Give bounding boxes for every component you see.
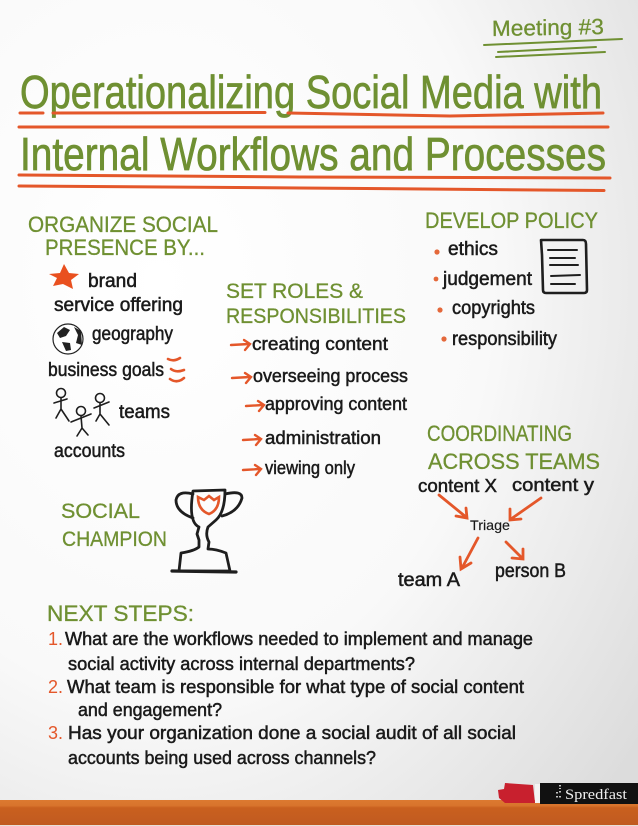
item: responsibility: responsibility <box>452 329 557 350</box>
heading: social champion <box>61 500 167 551</box>
item: judgement: judgement <box>442 269 533 290</box>
heading: set roles and responsibilities: RESPONSIBILITIES <box>226 305 406 328</box>
icon: star <box>49 264 79 289</box>
step 2: 2. <box>48 677 63 697</box>
item: viewing only: viewing only <box>265 458 355 478</box>
heading: next steps: NEXT STEPS: <box>47 601 194 626</box>
heading: set roles and responsibilities: SET ROLES & <box>226 280 363 303</box>
step 3: accounts being used across channels? <box>68 748 376 768</box>
step 1: What are the workflows needed to implement and manage <box>65 629 533 649</box>
text: business goals: business goals <box>48 360 164 381</box>
step 3: Has your organization done a social audit of all social <box>68 723 516 743</box>
text: content X: content X <box>418 476 497 496</box>
item: copyrights: copyrights <box>452 298 535 319</box>
text: geography: geography <box>92 324 173 345</box>
heading: coordinating across teams <box>427 421 600 474</box>
panel: set roles and responsibilities <box>226 280 408 478</box>
text: service offering: service offering <box>54 295 183 316</box>
step 2: What team is responsible for what type of social content <box>67 677 524 697</box>
heading: coordinating across teams: COORDINATING <box>427 421 572 446</box>
text: person B: person B <box>495 561 566 582</box>
icon: document <box>541 240 587 293</box>
heading: coordinating across teams: ACROSS TEAMS <box>428 449 600 474</box>
text: teams: teams <box>119 402 170 423</box>
heading: organize social presence: ORGANIZE SOCIAL <box>28 212 218 237</box>
step 2: and engagement? <box>78 700 222 720</box>
item: administration: administration <box>265 428 381 448</box>
marker <box>498 783 638 804</box>
panel: organize social presence <box>28 212 218 462</box>
item: approving content: approving content <box>265 394 407 414</box>
step 1 <box>48 629 533 674</box>
heading: set roles and responsibilities <box>226 280 406 328</box>
title <box>19 66 610 190</box>
step 3 <box>48 723 516 768</box>
heading: social champion: SOCIAL <box>61 500 140 523</box>
heading: organize social presence <box>28 212 218 260</box>
meeting label: Meeting #3 <box>492 14 604 41</box>
step 3: 3. <box>48 723 63 743</box>
step 1: social activity across internal departments? <box>68 654 415 674</box>
step 1: 1. <box>48 629 63 649</box>
icon: globe <box>53 324 83 354</box>
marker tray <box>0 800 638 826</box>
panel: coordinating across teams <box>398 421 600 591</box>
heading: social champion: CHAMPION <box>62 528 167 551</box>
meeting label <box>484 14 622 57</box>
text: brand: brand <box>88 271 137 292</box>
heading: develop policy: DEVELOP POLICY <box>425 208 598 233</box>
icon: checklist <box>168 358 184 381</box>
text: team A: team A <box>398 570 460 591</box>
item: ethics: ethics <box>448 239 498 260</box>
heading: organize social presence: PRESENCE BY... <box>45 235 205 260</box>
item: overseeing process: overseeing process <box>253 366 408 386</box>
icon: stick figure team <box>54 388 109 436</box>
panel: develop policy <box>425 208 598 350</box>
panel: next steps <box>47 601 533 768</box>
text: accounts: accounts <box>54 441 125 462</box>
text: content y: content y <box>512 475 594 495</box>
arrows: triage flow <box>439 495 541 569</box>
logo: Spredfast: Spredfast <box>565 787 628 803</box>
text: triage: Triage <box>470 517 510 533</box>
icon: trophy <box>172 490 242 572</box>
item: creating content: creating content <box>252 334 388 354</box>
step 2 <box>48 677 524 720</box>
